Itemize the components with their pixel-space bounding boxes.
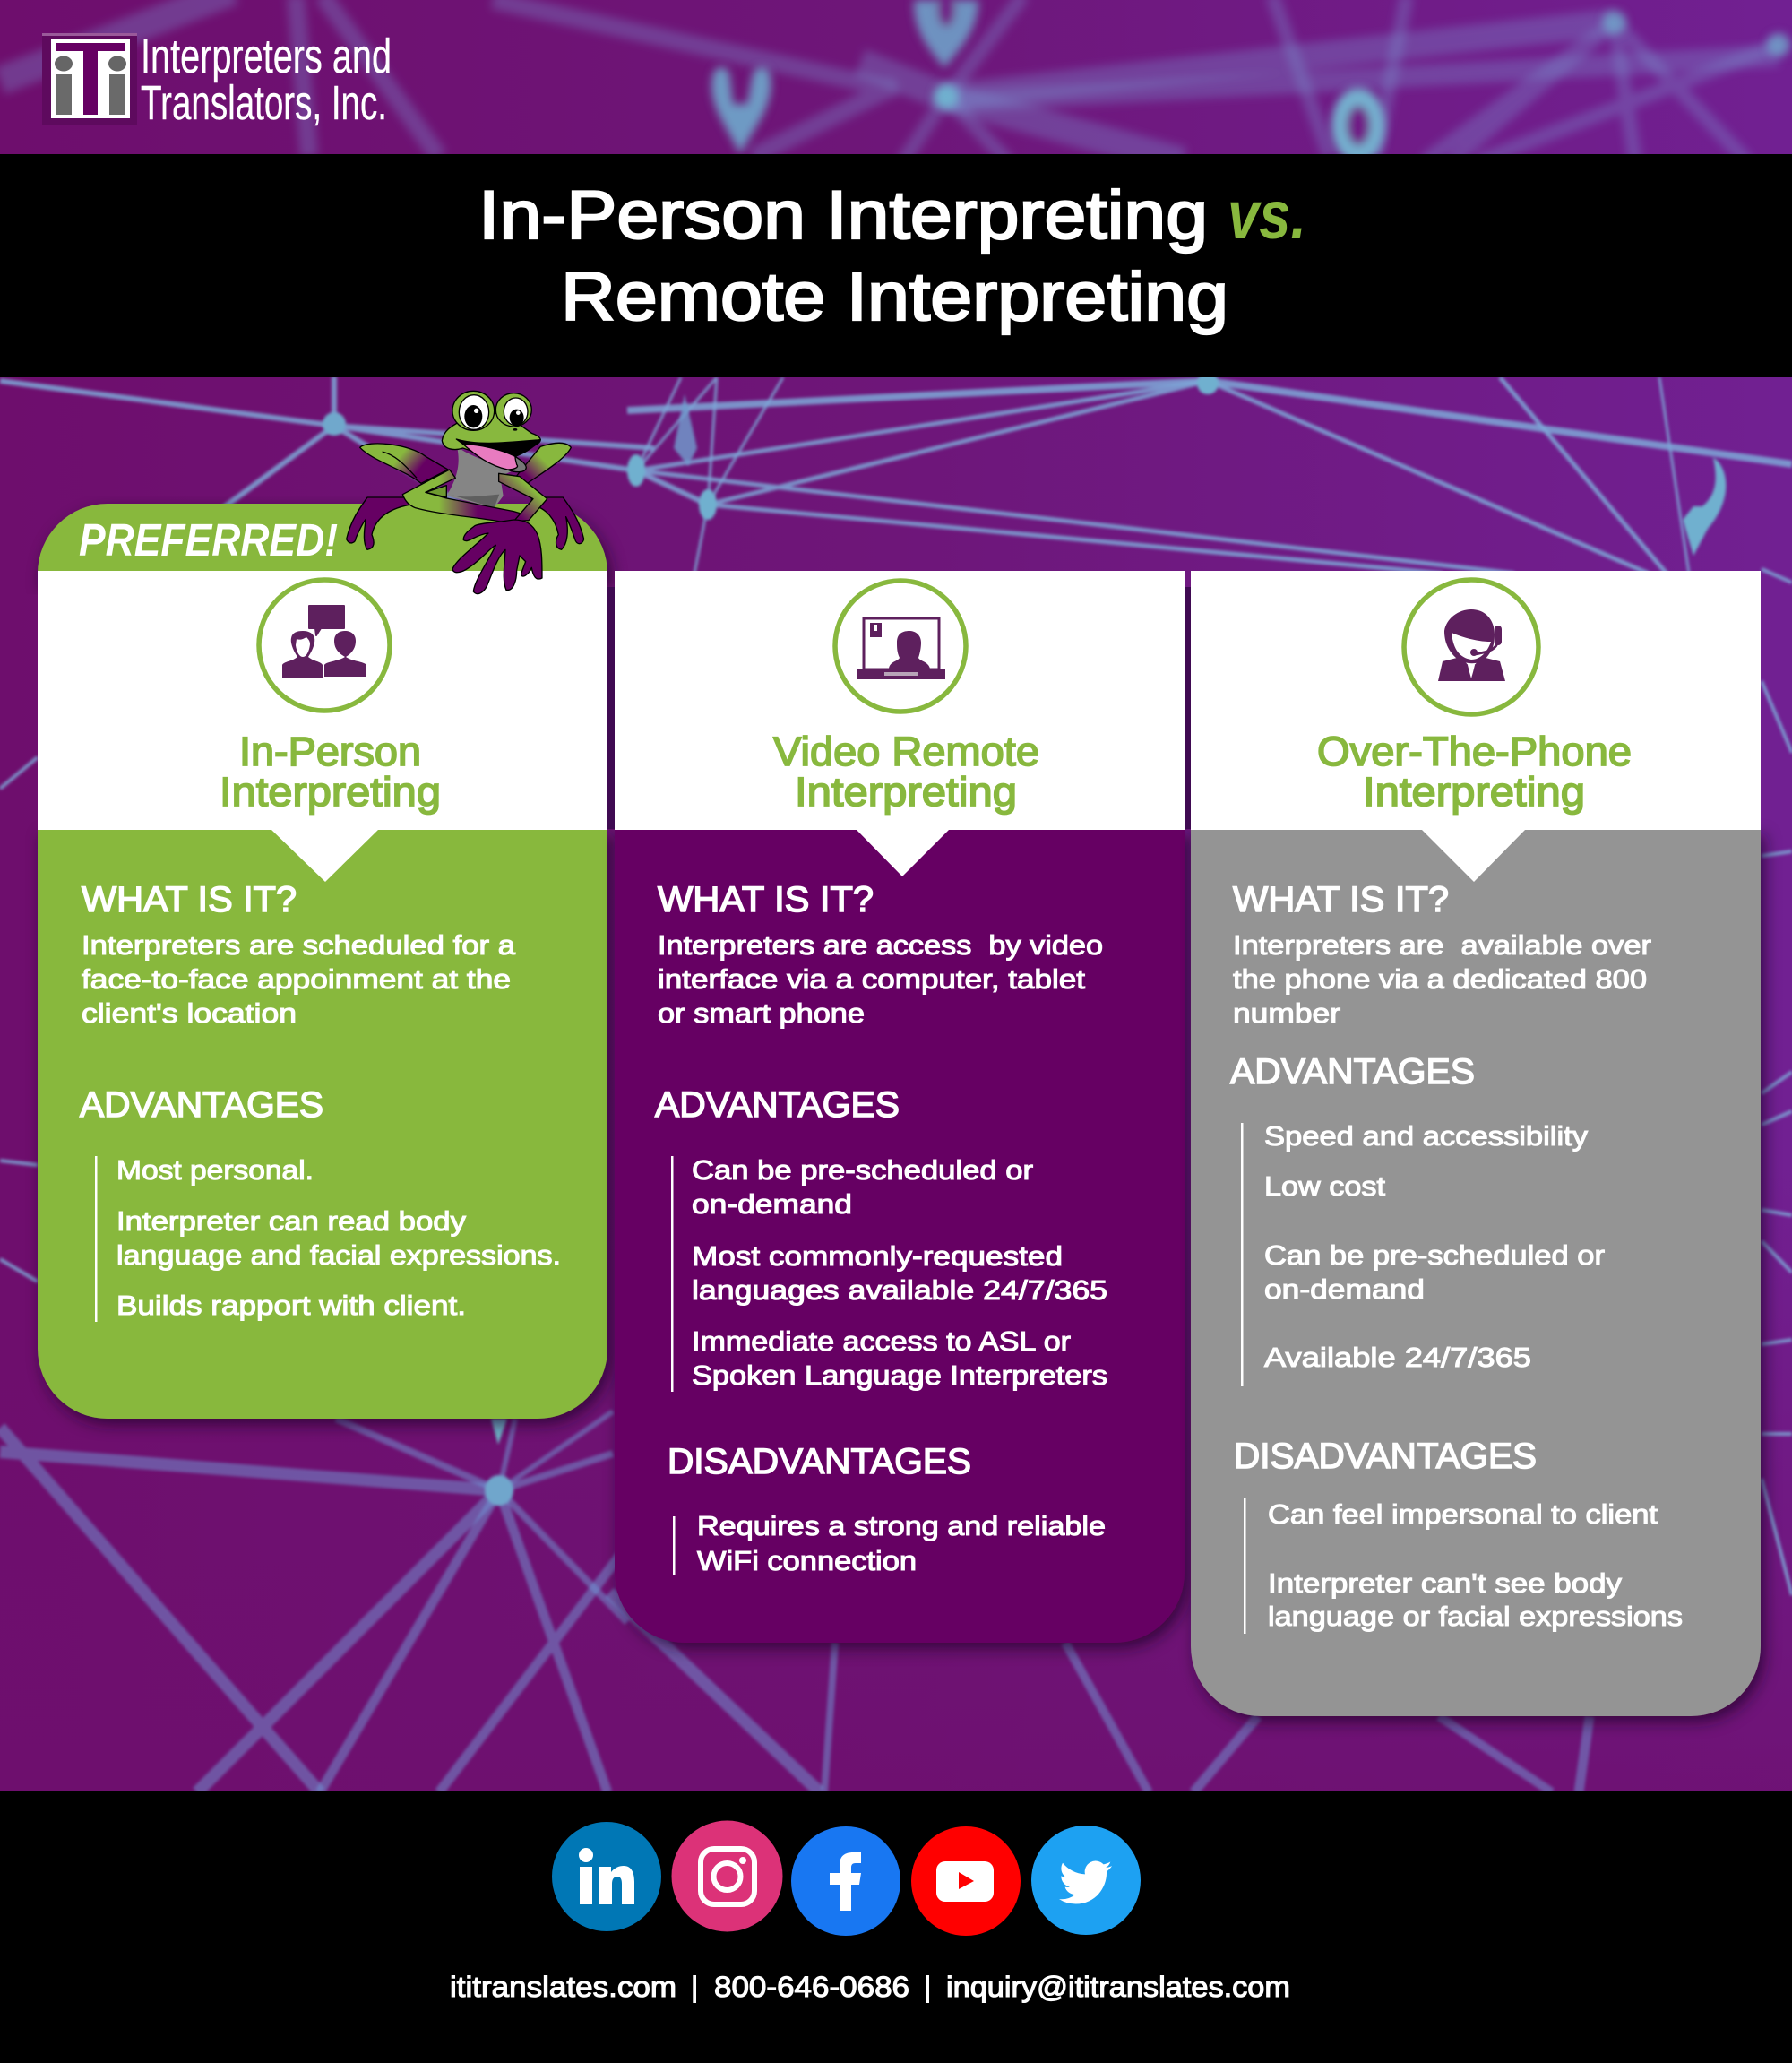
card body green xyxy=(38,829,607,1419)
contact line: | xyxy=(691,1971,698,2003)
advantages xyxy=(1230,1052,1605,1386)
white header xyxy=(38,571,607,830)
what is it xyxy=(658,880,1103,1029)
card heading: Interpreting xyxy=(220,769,441,815)
advantages: Most commonly-requested xyxy=(692,1240,1063,1272)
frog back feet xyxy=(347,497,584,549)
icon: facebook xyxy=(791,1826,900,1936)
disadvantages: Requires a strong and reliable xyxy=(697,1510,1106,1541)
what is it: WHAT IS IT? xyxy=(1233,880,1449,919)
what is it: or smart phone xyxy=(658,997,865,1029)
footer band: black xyxy=(0,1791,1792,2063)
what is it: the phone via a dedicated 800 xyxy=(1233,963,1647,995)
title xyxy=(478,177,1306,335)
frog arms xyxy=(402,470,547,523)
advantages: Can be pre-scheduled or xyxy=(1264,1239,1605,1271)
frog eyes xyxy=(452,391,531,431)
title: Remote Interpreting xyxy=(561,259,1228,335)
logo: ITI mark xyxy=(42,33,137,125)
panel: over-the-phone interpreting xyxy=(1191,571,1761,1716)
advantages: Low cost xyxy=(1264,1170,1385,1202)
icon: headset agent xyxy=(1404,580,1538,714)
contact line: ititranslates.com xyxy=(450,1971,676,2003)
disadvantages: Interpreter can't see body xyxy=(1268,1567,1623,1599)
advantages: on-demand xyxy=(1264,1273,1425,1305)
title: vs. xyxy=(1228,177,1306,254)
what is it xyxy=(1233,880,1651,1029)
disadvantages: DISADVANTAGES xyxy=(1234,1437,1537,1476)
preferred tab xyxy=(38,504,607,583)
advantages: Available 24/7/365 xyxy=(1264,1342,1531,1373)
contact line: 800-646-0686 xyxy=(714,1971,909,2003)
advantages: Most personal. xyxy=(116,1154,314,1186)
what is it: number xyxy=(1233,997,1340,1029)
white header xyxy=(1191,571,1761,830)
panel: video remote interpreting xyxy=(615,571,1185,1643)
what is it: Interpreters are scheduled for a xyxy=(82,929,516,961)
what is it xyxy=(82,880,516,1029)
disadvantages: language or facial expressions xyxy=(1268,1601,1683,1632)
logo: company name: Interpreters and xyxy=(141,30,392,83)
card heading: Video Remote xyxy=(773,729,1039,774)
frog front hand xyxy=(452,520,542,594)
disadvantages xyxy=(1234,1437,1683,1634)
advantages: ADVANTAGES xyxy=(655,1085,900,1125)
what is it: WHAT IS IT? xyxy=(658,880,874,919)
contact line: inquiry@ititranslates.com xyxy=(946,1971,1290,2003)
card heading xyxy=(220,729,441,815)
panel: in-person interpreting xyxy=(38,504,607,1419)
icon: linkedin xyxy=(552,1822,661,1931)
what is it: Interpreters are available over xyxy=(1233,929,1651,961)
pointer xyxy=(856,829,950,876)
frog mouth xyxy=(456,439,540,472)
card heading xyxy=(1317,729,1632,815)
pointer xyxy=(1421,829,1526,882)
icon: instagram xyxy=(672,1821,783,1932)
card body purple xyxy=(615,829,1185,1643)
contact line xyxy=(450,1971,1290,2003)
advantages: Speed and accessibility xyxy=(1264,1120,1589,1152)
advantages: Can be pre-scheduled or xyxy=(692,1154,1033,1186)
advantages: ADVANTAGES xyxy=(1230,1052,1475,1092)
frog back legs xyxy=(360,443,571,485)
what is it: face-to-face appoinment at the xyxy=(82,963,511,995)
advantages: Interpreter can read body xyxy=(116,1205,467,1237)
icon: youtube xyxy=(911,1826,1021,1936)
social icons xyxy=(552,1821,1141,1936)
title: In-Person Interpreting xyxy=(478,177,1208,254)
disadvantages: Can feel impersonal to client xyxy=(1268,1498,1658,1530)
header band: black title background xyxy=(0,154,1792,377)
preferred label: PREFERRED! xyxy=(79,514,338,565)
logo: company name: Translators, Inc. xyxy=(141,76,387,130)
white header xyxy=(615,571,1185,830)
card heading: Over-The-Phone xyxy=(1317,729,1632,774)
advantages: Builds rapport with client. xyxy=(116,1290,466,1321)
icon: video call xyxy=(835,581,966,712)
advantages: languages available 24/7/365 xyxy=(692,1274,1107,1306)
advantages xyxy=(80,1085,561,1322)
logo: company name xyxy=(141,30,392,130)
icon: two people talking xyxy=(259,580,390,711)
frog throat xyxy=(446,446,517,508)
contact line: | xyxy=(924,1971,931,2003)
what is it: client's location xyxy=(82,997,297,1029)
disadvantages: DISADVANTAGES xyxy=(668,1442,971,1481)
advantages xyxy=(655,1085,1107,1392)
card heading xyxy=(773,729,1039,815)
card body gray xyxy=(1191,829,1761,1716)
pointer xyxy=(271,829,379,882)
advantages: on-demand xyxy=(692,1188,852,1220)
advantages: Spoken Language Interpreters xyxy=(692,1360,1107,1391)
disadvantages xyxy=(668,1442,1106,1576)
advantages: ADVANTAGES xyxy=(80,1085,323,1125)
card heading: Interpreting xyxy=(1363,769,1585,815)
card heading: In-Person xyxy=(239,729,421,774)
advantages: Immediate access to ASL or xyxy=(692,1325,1071,1357)
advantages: language and facial expressions. xyxy=(116,1239,561,1271)
icon: frog mascot xyxy=(347,391,584,594)
frog head xyxy=(442,413,540,466)
what is it: WHAT IS IT? xyxy=(82,880,297,919)
what is it: interface via a computer, tablet xyxy=(658,963,1085,995)
card heading: Interpreting xyxy=(795,769,1017,815)
gaps between the white card headers xyxy=(607,587,1191,829)
icon: twitter xyxy=(1031,1826,1141,1935)
disadvantages: WiFi connection xyxy=(697,1545,917,1576)
what is it: Interpreters are access by video xyxy=(658,929,1103,961)
